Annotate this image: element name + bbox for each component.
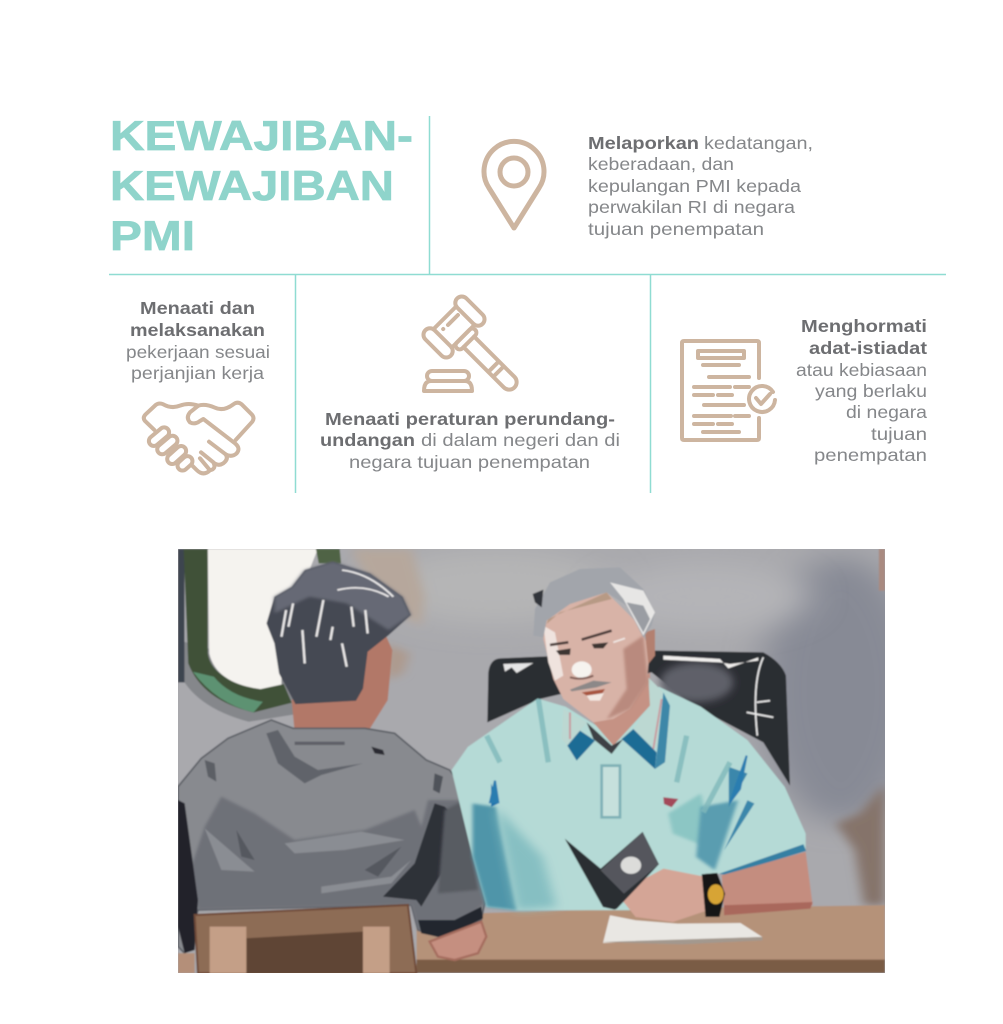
text block: menghormati adat-istiadat: penempatan bbox=[814, 445, 927, 465]
text block: menaati dan melaksanakan: Menaati dan bbox=[140, 298, 255, 318]
text block: menaati dan melaksanakan: melaksanakan bbox=[130, 320, 265, 340]
text block: menaati peraturan: Menaati peraturan perundang- bbox=[325, 409, 615, 429]
title: KEWAJIBAN- bbox=[110, 112, 413, 159]
text block: melaporkan: perwakilan RI di negara bbox=[588, 197, 795, 217]
text block: melaporkan bbox=[588, 133, 813, 239]
text block: menghormati adat-istiadat bbox=[796, 316, 927, 465]
passbook bbox=[565, 832, 659, 910]
text block: menghormati adat-istiadat: yang berlaku bbox=[815, 381, 927, 401]
text block: menghormati adat-istiadat: atau kebiasaan bbox=[796, 360, 927, 380]
text block: menaati peraturan: di dalam negeri dan di bbox=[421, 430, 620, 450]
text block: menghormati adat-istiadat: tujuan bbox=[871, 424, 927, 444]
officer: head, collar and shirt details bbox=[487, 567, 747, 817]
infographic: Kewajiban-Kewajiban PMI bbox=[109, 116, 946, 973]
officer: chair, shirt base bbox=[452, 687, 806, 910]
text block: melaporkan: tujuan penempatan bbox=[588, 219, 764, 239]
officer: forearm and hand bbox=[722, 852, 813, 908]
title: PMI bbox=[110, 212, 195, 259]
watch bbox=[702, 873, 725, 917]
title bbox=[110, 112, 413, 259]
seated man: shirt, forearm and wooden chair bbox=[178, 720, 486, 973]
text block: menaati peraturan bbox=[320, 409, 620, 472]
icon: document with check bbox=[682, 341, 775, 440]
paper bbox=[603, 915, 762, 943]
seated man: neck bbox=[292, 633, 392, 730]
text block: melaporkan: Melaporkan bbox=[588, 133, 699, 153]
text block: menaati peraturan: negara tujuan penempatan bbox=[349, 452, 590, 472]
seated man: hair bbox=[267, 562, 411, 704]
text block: menaati dan melaksanakan: perjanjian kerja bbox=[131, 363, 264, 383]
text block: menghormati adat-istiadat: adat-istiadat bbox=[809, 338, 927, 358]
title: KEWAJIBAN bbox=[110, 162, 394, 209]
officer: shirt bbox=[452, 687, 806, 910]
icon: gavel bbox=[421, 294, 535, 408]
window frame bbox=[184, 642, 294, 722]
text block: menaati peraturan: undangan bbox=[320, 430, 415, 450]
text block: menaati dan melaksanakan bbox=[126, 298, 270, 383]
icon: handshake bbox=[144, 403, 254, 473]
illustration: watercolor of two men at a desk bbox=[170, 540, 920, 980]
text block: melaporkan: kepulangan PMI kepada bbox=[588, 176, 801, 196]
text block: menghormati adat-istiadat: di negara bbox=[846, 402, 927, 422]
text block: melaporkan: kedatangan, bbox=[704, 133, 813, 153]
desk bbox=[416, 905, 885, 960]
text block: menghormati adat-istiadat: Menghormati bbox=[801, 316, 927, 336]
icon: location pin bbox=[484, 141, 544, 228]
wall bbox=[170, 540, 897, 980]
text block: menaati dan melaksanakan: pekerjaan sesuai bbox=[126, 342, 270, 362]
text block: melaporkan: keberadaan, dan bbox=[588, 154, 734, 174]
